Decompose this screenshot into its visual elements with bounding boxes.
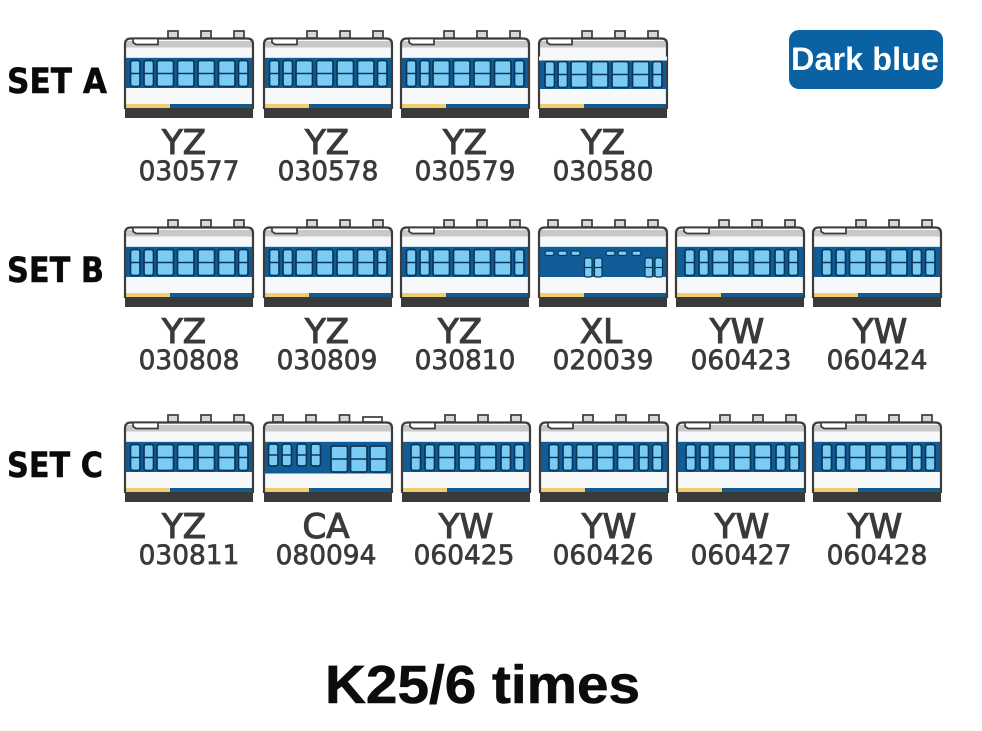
car label: YZ 030578: 030578 bbox=[278, 156, 378, 187]
car label: YZ 030809 bbox=[277, 312, 377, 376]
car label: YW 060424: 060424 bbox=[827, 345, 927, 376]
train car: YW 060426 bbox=[540, 415, 668, 502]
car label: YW 060425: YW bbox=[438, 507, 493, 547]
train car: YZ 030579 bbox=[401, 31, 529, 118]
badge: Dark blue bbox=[789, 30, 943, 89]
train car: YW 060424 bbox=[813, 220, 941, 307]
car label: YW 060425 bbox=[414, 507, 514, 571]
train car: YZ 030809 bbox=[264, 220, 392, 307]
car label: YZ 030810: 030810 bbox=[415, 345, 515, 376]
train car: YZ 030577 bbox=[125, 31, 253, 118]
car label: YZ 030811 bbox=[139, 507, 239, 571]
car label: YW 060428 bbox=[827, 507, 927, 571]
car label: CA 080094: CA bbox=[302, 507, 350, 547]
train car: YW 060428 bbox=[813, 415, 941, 502]
label: SET B: SET B bbox=[7, 251, 104, 291]
label: SET C: SET C bbox=[7, 446, 103, 486]
car label: XL 020039: 020039 bbox=[553, 345, 653, 376]
train car: YZ 030580 bbox=[539, 31, 667, 118]
car label: YZ 030580: 030580 bbox=[553, 156, 653, 187]
train car: YW 060423 bbox=[676, 220, 804, 307]
train car: CA 080094 bbox=[264, 415, 392, 502]
train car: YZ 030811 bbox=[125, 415, 253, 502]
car label: YZ 030810: YZ bbox=[437, 312, 482, 352]
car label: CA 080094: 080094 bbox=[276, 540, 376, 571]
car label: YZ 030577: 030577 bbox=[139, 156, 239, 187]
car label: YW 060427: 060427 bbox=[691, 540, 791, 571]
car label: YZ 030808 bbox=[139, 312, 239, 376]
car label: YW 060427 bbox=[691, 507, 791, 571]
car label: YZ 030578 bbox=[278, 123, 378, 187]
car label: YZ 030808: 030808 bbox=[139, 345, 239, 376]
car label: YZ 030809: YZ bbox=[304, 312, 349, 352]
car label: YZ 030809: 030809 bbox=[277, 345, 377, 376]
car label: YW 060426 bbox=[553, 507, 653, 571]
car label: YZ 030580: YZ bbox=[580, 123, 625, 163]
car label: YW 060427: YW bbox=[714, 507, 769, 547]
car label: YZ 030577: YZ bbox=[161, 123, 206, 163]
car label: YZ 030579 bbox=[415, 123, 515, 187]
car label: YW 060424 bbox=[827, 312, 927, 376]
train car: YZ 030578 bbox=[264, 31, 392, 118]
car label: YW 060426: YW bbox=[581, 507, 636, 547]
car label: YW 060428: 060428 bbox=[827, 540, 927, 571]
car label: YZ 030578: YZ bbox=[304, 123, 349, 163]
car label: YZ 030808: YZ bbox=[161, 312, 206, 352]
car label: YW 060423: YW bbox=[709, 312, 764, 352]
car label: YZ 030811: 030811 bbox=[139, 540, 239, 571]
car label: YW 060423: 060423 bbox=[691, 345, 791, 376]
label: SET A: SET A bbox=[7, 62, 107, 102]
car label: CA 080094 bbox=[276, 507, 376, 571]
car label: YW 060425: 060425 bbox=[414, 540, 514, 571]
car label: YW 060426: 060426 bbox=[553, 540, 653, 571]
train car: YZ 030808 bbox=[125, 220, 253, 307]
train car: YW 060427 bbox=[677, 415, 805, 502]
car label: XL 020039: XL bbox=[580, 312, 622, 352]
car label: YZ 030579: YZ bbox=[442, 123, 487, 163]
car label: YZ 030810 bbox=[415, 312, 515, 376]
car label: YZ 030811: YZ bbox=[161, 507, 206, 547]
car label: XL 020039 bbox=[553, 312, 653, 376]
car label: YZ 030579: 030579 bbox=[415, 156, 515, 187]
title: K25/6 times bbox=[325, 655, 640, 715]
car label: YW 060423 bbox=[691, 312, 791, 376]
car label: YZ 030580 bbox=[553, 123, 653, 187]
train car: XL 020039 bbox=[539, 220, 667, 307]
train car: YZ 030810 bbox=[401, 220, 529, 307]
badge: Dark blue: Dark blue bbox=[791, 41, 939, 77]
car label: YW 060428: YW bbox=[847, 507, 902, 547]
train car: YW 060425 bbox=[402, 415, 530, 502]
car label: YZ 030577 bbox=[139, 123, 239, 187]
car label: YW 060424: YW bbox=[852, 312, 907, 352]
